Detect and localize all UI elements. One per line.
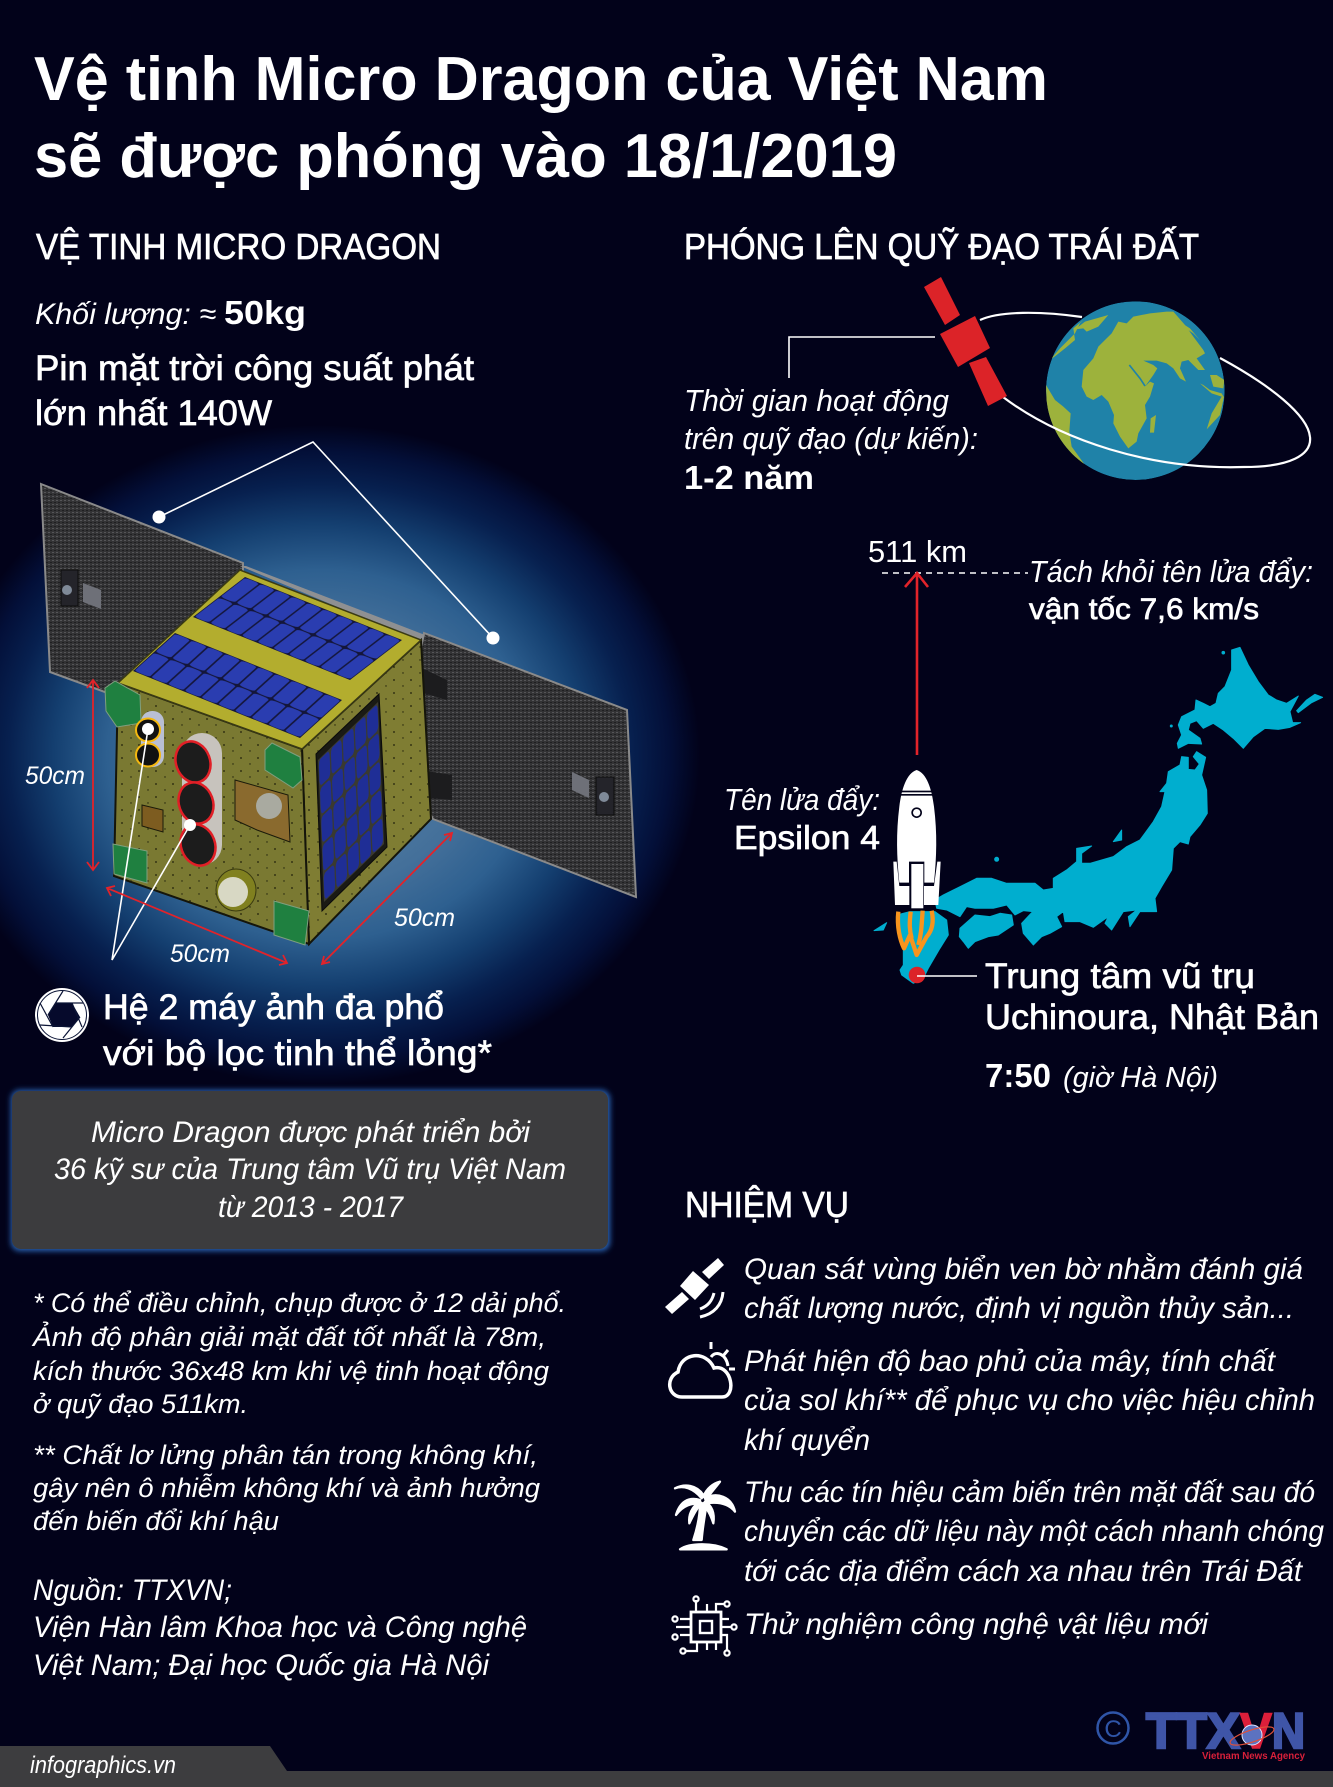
satellite body — [105, 566, 431, 945]
rocket flames — [898, 911, 933, 955]
mission text 1 — [744, 1253, 1303, 1325]
footer site name: infographics.vn — [30, 1752, 176, 1779]
leader lines: solar wings — [152, 442, 500, 644]
source — [33, 1574, 527, 1682]
camera text — [103, 988, 492, 1073]
callout: developers: từ 2013 - 2017 — [218, 1191, 404, 1224]
top solar cells: back group — [193, 577, 402, 680]
lifetime text: Thời gian hoạt động — [684, 383, 949, 418]
lifetime text: trên quỹ đạo (dự kiến): — [684, 421, 978, 456]
footnotes: kích thước 36x48 km khi vệ tinh hoạt động — [33, 1356, 549, 1386]
dimension labels: 50cm — [25, 762, 85, 790]
mission text 4: Thử nghiệm công nghệ vật liệu mới — [744, 1608, 1209, 1641]
source: Viện Hàn lâm Khoa học và Công nghệ — [33, 1611, 527, 1644]
side solar array — [316, 694, 387, 911]
rocket label — [724, 782, 880, 856]
footer bar — [0, 1746, 1333, 1787]
launch site marker — [909, 967, 977, 983]
green corner blocks — [105, 681, 141, 727]
rocket label: Tên lửa đẩy: — [724, 782, 880, 817]
icon: camera shutter — [35, 988, 89, 1042]
dimension arrows — [87, 680, 452, 965]
arrow: ascent — [905, 573, 928, 755]
footnotes: Ảnh độ phân giải mặt đất tốt nhất là 78m, — [31, 1320, 546, 1352]
title: sẽ được phóng vào 18/1/2019 — [34, 122, 897, 191]
solar power text: Pin mặt trời công suất phát — [35, 349, 474, 388]
footnotes: đến biến đổi khí hậu — [33, 1506, 279, 1536]
dimension labels: 50cm — [170, 940, 230, 968]
icon: rocket — [893, 770, 941, 955]
leader lines: cameras — [112, 723, 196, 960]
background glow behind satellite — [0, 425, 700, 1085]
footnotes: ở quỹ đạo 511km. — [33, 1389, 248, 1419]
right face — [302, 640, 431, 944]
icon: red satellite — [924, 277, 1007, 406]
logo: TTXVN: N — [1272, 1703, 1305, 1759]
heading: satellite: VỆ TINH MICRO DRAGON — [36, 226, 441, 267]
copyright symbol — [1098, 1712, 1128, 1744]
launch site text: Trung tâm vũ trụ — [985, 957, 1255, 996]
title: Vệ tinh Micro Dragon của Việt Nam — [34, 45, 1048, 114]
callout: developers: Micro Dragon được phát triển bởi — [91, 1116, 531, 1149]
rocket stripes and window — [901, 791, 933, 818]
mission text 3 — [744, 1476, 1324, 1588]
logo: TTXVN: V — [1240, 1703, 1273, 1759]
solar wing: left — [41, 484, 260, 700]
separation text: vận tốc 7,6 km/s — [1029, 593, 1259, 626]
footnotes: * Có thể điều chỉnh, chụp được ở 12 dải phổ. — [33, 1288, 566, 1318]
front face — [114, 683, 309, 944]
mission text 1: chất lượng nước, định vị nguồn thủy sản... — [744, 1292, 1294, 1325]
solar power text: lớn nhất 140W — [35, 394, 272, 433]
launch time — [985, 1057, 1218, 1094]
icon: microchip — [672, 1596, 737, 1656]
callout: developers — [11, 1090, 610, 1251]
mass — [35, 294, 306, 331]
logo: TTXVN — [1146, 1703, 1305, 1762]
mission text 3: tới các địa điểm cách xa nhau trên Trái Đất — [744, 1555, 1304, 1588]
satellite illustration — [25, 442, 636, 968]
map: Japan — [874, 647, 1323, 983]
footnotes: gây nên ô nhiễm không khí và ảnh hưởng — [33, 1472, 540, 1503]
mission text 2: Phát hiện độ bao phủ của mây, tính chất — [744, 1345, 1277, 1378]
rocket boosters — [893, 862, 941, 908]
panel: satellite specs — [35, 226, 474, 433]
source: Nguồn: TTXVN; — [33, 1574, 232, 1607]
top solar cells: front group — [133, 633, 342, 738]
camera text: Hệ 2 máy ảnh đa phổ — [103, 988, 444, 1027]
heading: orbit: PHÓNG LÊN QUỸ ĐẠO TRÁI ĐẤT — [684, 226, 1199, 267]
heading: missions: NHIỆM VỤ — [685, 1184, 849, 1225]
camera text: với bộ lọc tinh thể lỏng* — [103, 1034, 492, 1073]
rocket body — [897, 770, 936, 883]
dimension labels: 50cm — [394, 904, 455, 932]
earth globe — [1046, 301, 1225, 480]
orbit back arc — [980, 313, 1310, 437]
lifetime text: 1-2 năm — [684, 459, 814, 496]
solar wing: right — [400, 633, 636, 897]
launch time: (giờ Hà Nội) — [1063, 1062, 1218, 1094]
altitude dashed line — [882, 572, 1028, 574]
icon: palm tree — [675, 1482, 735, 1549]
rocket label: Epsilon 4 — [734, 819, 880, 856]
lifetime text — [684, 383, 978, 496]
mission text 2: khí quyển — [744, 1424, 870, 1457]
mass: Khối lượng: ≈ — [35, 298, 216, 331]
leader line: lifetime — [789, 337, 935, 378]
orbit front arc — [1003, 397, 1310, 467]
solar power text — [35, 349, 474, 433]
launch site text — [985, 957, 1319, 1037]
instruments — [182, 733, 222, 865]
mission text 2: của sol khí** để phục vụ cho việc hiệu chỉnh — [744, 1384, 1315, 1417]
separation text — [1029, 554, 1313, 626]
icon: cloud and sun — [670, 1342, 735, 1397]
altitude label: 511 km — [868, 534, 967, 569]
mass: 50kg — [224, 294, 306, 331]
footnotes — [31, 1288, 566, 1536]
copyright symbol: C — [1104, 1716, 1122, 1743]
footnotes: ** Chất lơ lửng phân tán trong không khí, — [33, 1440, 538, 1470]
source: Việt Nam; Đại học Quốc gia Hà Nội — [33, 1649, 490, 1682]
logo: TTXVN: TTX — [1146, 1703, 1240, 1759]
title — [34, 45, 1048, 191]
back edge of body — [240, 566, 425, 642]
launch site text: Uchinoura, Nhật Bản — [985, 998, 1319, 1037]
mission text 2 — [744, 1345, 1315, 1457]
camera lenses: yellow — [136, 718, 160, 766]
callout: developers: 36 kỹ sư của Trung tâm Vũ trụ Việt Nam — [54, 1153, 566, 1186]
top face — [118, 570, 421, 749]
mission text 1: Quan sát vùng biển ven bờ nhằm đánh giá — [744, 1253, 1303, 1286]
launch time: 7:50 — [985, 1057, 1051, 1094]
dimension labels — [25, 762, 455, 968]
icon: mission satellite — [665, 1258, 724, 1317]
separation text: Tách khỏi tên lửa đẩy: — [1029, 554, 1313, 589]
camera lenses: red — [170, 736, 221, 871]
logo: TTXVN: Vietnam News Agency — [1202, 1751, 1305, 1762]
